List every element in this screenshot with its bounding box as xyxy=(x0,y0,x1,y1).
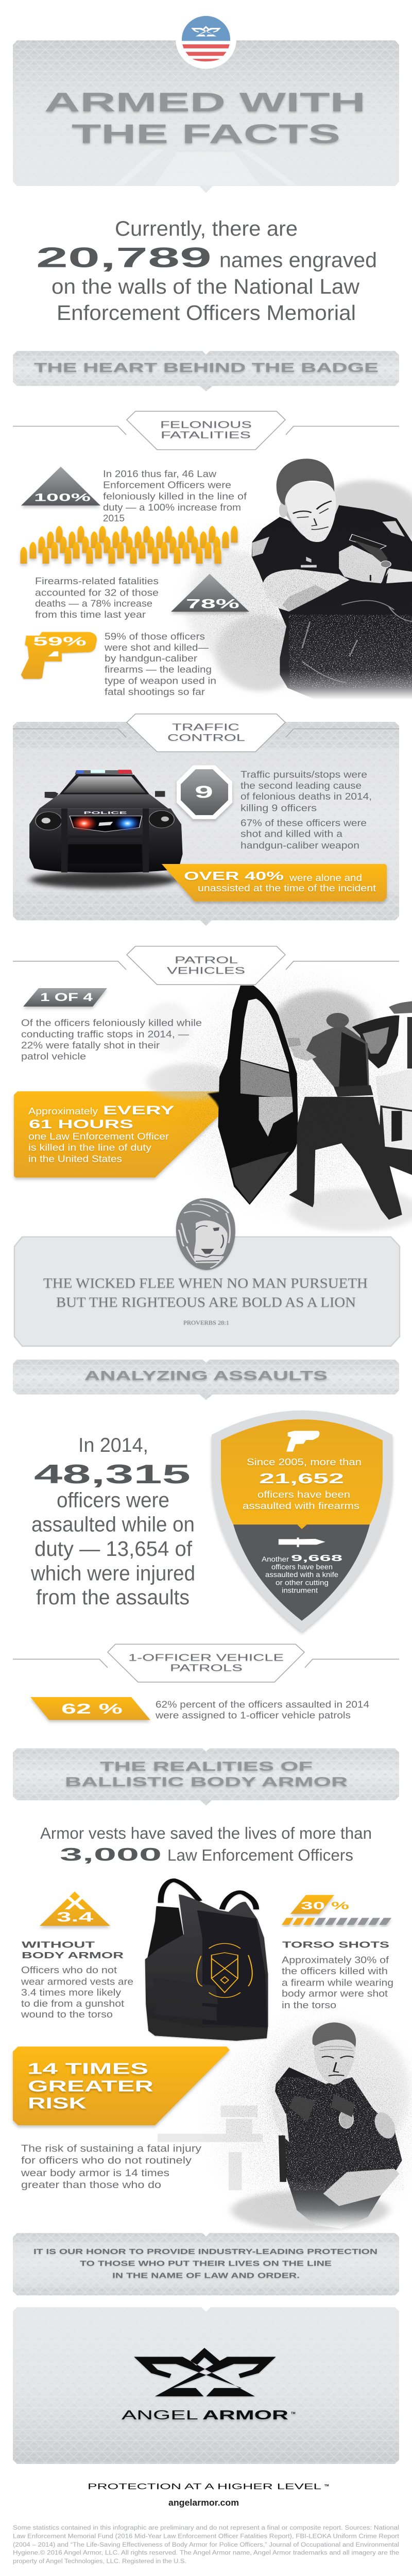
text: traffic pursuits: handgun-caliber weapon xyxy=(241,840,359,851)
photo: uniformed officer portrait xyxy=(158,2004,412,2237)
callout: every 61 hours: Approximately xyxy=(28,1106,98,1116)
text: torso shots: body armor were shot xyxy=(282,1988,388,1998)
shield: assault statistics: officers have been xyxy=(258,1489,350,1500)
text: without body armor: wear armored vests are xyxy=(21,1976,133,1987)
shield: assault statistics: 21,652 xyxy=(259,1470,344,1487)
heading: felonious fatalities: FELONIOUS xyxy=(160,419,252,430)
footnote sources xyxy=(13,2524,400,2565)
text: firearms-related fatalities: accounted for 32 of those xyxy=(35,587,159,598)
text: 62 percent xyxy=(155,1699,369,1721)
callout: over 40% xyxy=(162,864,387,902)
callout: every 61 hours: is killed in the line of duty xyxy=(28,1142,152,1153)
intro statement: Currently, there are xyxy=(115,217,298,241)
panel: proverbs quote xyxy=(14,1236,400,1347)
text: without body armor: to die from a gunshot xyxy=(21,1998,125,2009)
header panel: armed with the facts xyxy=(13,40,399,193)
triangle stat: 78% xyxy=(171,574,249,612)
triangle stat: x 3.4: X xyxy=(64,1893,86,1913)
footnote sources: Hygiene.© 2016 Angel Armor, LLC. All rights reserved. The Angel Armor name, Angel Armor trademarks and all imagery are the xyxy=(13,2549,399,2556)
photo: police car xyxy=(29,770,183,888)
photo: police car: POLICE xyxy=(83,811,127,815)
bullets pictogram: 46 bullets xyxy=(21,526,238,564)
callout: every 61 hours: one Law Enforcement Officer xyxy=(28,1131,169,1142)
text: 46 officers killed xyxy=(103,468,247,523)
title: THE FACTS xyxy=(72,120,340,149)
text: patrol vehicle shootings: patrol vehicle xyxy=(21,1051,86,1061)
website: angelarmor.com xyxy=(168,2498,239,2507)
text: armor vests saved 3,000: 3,000 xyxy=(60,1844,162,1865)
text: without body armor: WITHOUT xyxy=(22,1940,95,1950)
wordmark: angel armor: ANGEL xyxy=(122,2409,198,2422)
shield: assault statistics xyxy=(212,1411,392,1632)
panel: honor statement: IN THE NAME OF LAW AND ORDER. xyxy=(112,2272,300,2280)
text: handgun-caliber firearms: 59% of those officers xyxy=(105,631,205,641)
panel: traffic control xyxy=(13,714,399,926)
text: 48,315 officers assaulted: from the assaults xyxy=(36,1586,190,1609)
text: handgun-caliber firearms: firearms — the leading xyxy=(105,664,212,674)
heading: patrol vehicles: VEHICLES xyxy=(167,965,245,976)
text: firearms-related fatalities: deaths — a 78% increase xyxy=(35,598,152,609)
text: handgun-caliber firearms: were shot and killed— xyxy=(104,642,209,653)
triangle stat: 100% xyxy=(21,467,100,505)
footnote sources: property of Angel Technologies, LLC. Registered in the U.S. xyxy=(13,2557,186,2565)
shield: assault statistics: Another xyxy=(262,1555,289,1563)
text: without body armor: BODY ARMOR xyxy=(22,1950,124,1960)
callout: over 40%: OVER 40% xyxy=(184,870,284,883)
heading: traffic control xyxy=(127,714,285,752)
text: torso shots: TORSO SHOTS xyxy=(282,1940,389,1950)
photo: officer aiming handgun xyxy=(171,459,412,700)
text: patrol vehicle shootings: Of the officers feloniously killed while xyxy=(21,1018,202,1028)
triangle stat: x 3.4 xyxy=(40,1891,110,1926)
callout: over 40%: were alone and xyxy=(289,872,362,883)
text: handgun-caliber firearms xyxy=(104,631,216,697)
text: armor vests saved 3,000 xyxy=(40,1824,372,1865)
text: torso shots: in the torso xyxy=(282,1999,336,2010)
text: handgun-caliber firearms: fatal shootings so far xyxy=(105,686,205,697)
text: risk of fatal injury: wear body armor is 14 times xyxy=(21,2167,169,2179)
intro statement xyxy=(36,217,377,325)
intro statement: on the walls of the National Law xyxy=(52,275,359,298)
heading: traffic control: TRAFFIC xyxy=(172,722,239,733)
text: 48,315 officers assaulted: duty — 13,654 of xyxy=(35,1537,192,1561)
callout: 14 times greater risk xyxy=(13,2046,230,2125)
heading: analyzing assaults xyxy=(13,1360,399,1400)
badge: 1 of 4 xyxy=(23,988,107,1007)
panel: proverbs quote: THE WICKED FLEE WHEN NO MAN PURSUETH xyxy=(43,1275,368,1291)
text: risk of fatal injury xyxy=(21,2143,201,2191)
text: 48,315 officers assaulted xyxy=(30,1434,195,1609)
text: traffic pursuits xyxy=(241,769,372,851)
heading: 1-officer vehicle patrols: PATROLS xyxy=(170,1663,243,1673)
title: ARMED WITH xyxy=(44,88,366,117)
text: risk of fatal injury: for officers who do not routinely xyxy=(21,2155,192,2166)
text: without body armor: wound to the torso xyxy=(21,2009,113,2020)
text: 46 officers killed: duty — a 100% increase from xyxy=(103,502,241,513)
icon: white handgun xyxy=(286,1431,319,1452)
heading: 1-officer vehicle patrols xyxy=(13,1644,399,1682)
heading: the realities of ballistic body armor: BALLISTIC BODY ARMOR xyxy=(65,1775,348,1789)
callout: every 61 hours: 61 HOURS xyxy=(29,1117,133,1131)
triangle stat: x 3.4: 3.4 xyxy=(57,1909,93,1924)
wordmark: angel armor: TM xyxy=(291,2412,296,2415)
text: without body armor: Officers who do not xyxy=(21,1964,117,1975)
callout: 14 times greater risk: RISK xyxy=(28,2094,87,2112)
photo: ballistic vest xyxy=(145,1880,268,2041)
text: 48,315 officers assaulted: 48,315 xyxy=(34,1460,191,1489)
intro statement: Enforcement Officers Memorial xyxy=(57,301,356,325)
heading: the heart behind the badge: THE HEART BEHIND THE BADGE xyxy=(34,361,379,375)
panel: angel armor logo xyxy=(13,2307,399,2464)
icon: handgun with 59%: 59% xyxy=(33,635,87,649)
text: firearms-related fatalities: Firearms-related fatalities xyxy=(35,575,159,586)
text: handgun-caliber firearms: type of weapon used in xyxy=(105,675,216,686)
tagline: TM xyxy=(324,2484,329,2487)
shield: assault statistics: Since 2005, more than xyxy=(247,1456,362,1467)
badge: 30% torso stripes: 30 xyxy=(301,1900,325,1912)
text: torso shots xyxy=(282,1940,393,2010)
text: torso shots: the officers killed with xyxy=(282,1965,388,1976)
text: 48,315 officers assaulted: officers were xyxy=(57,1488,169,1512)
text: 62 percent: were assigned to 1-officer vehicle patrols xyxy=(155,1710,351,1721)
badge: 30% torso stripes xyxy=(282,1895,391,1925)
icon: handgun with 59% xyxy=(21,632,97,679)
octagon stat: 9 xyxy=(177,765,232,819)
text: patrol vehicle shootings: conducting traffic stops in 2014, — xyxy=(21,1029,189,1040)
heading: felonious fatalities xyxy=(13,411,399,450)
text: traffic pursuits: shot and killed with a xyxy=(241,828,343,839)
text: armor vests saved 3,000: Law Enforcement Officers xyxy=(167,1846,353,1864)
callout: over 40%: unassisted at the time of the incident xyxy=(198,883,376,893)
shield: assault statistics: or other cutting xyxy=(276,1579,329,1586)
wordmark: angel armor: ARMOR xyxy=(202,2409,288,2422)
shield: assault statistics: 9,668 xyxy=(291,1553,342,1563)
callout: every 61 hours: EVERY xyxy=(103,1104,175,1117)
tagline: PROTECTION AT A HIGHER LEVEL xyxy=(88,2483,321,2492)
icon: flag badge xyxy=(176,10,236,69)
title xyxy=(44,88,366,149)
text: traffic pursuits: 67% of these officers were xyxy=(241,818,367,828)
triangle stat: 78%: 78% xyxy=(186,597,240,611)
text: torso shots: Approximately 30% of xyxy=(282,1955,389,1965)
text: traffic pursuits: the second leading cause xyxy=(241,780,362,791)
text: 46 officers killed: feloniously killed in the line of xyxy=(103,491,247,502)
logo mark xyxy=(134,2348,276,2396)
text: risk of fatal injury: greater than those who do xyxy=(21,2179,161,2191)
shield: assault statistics: assaulted with firearms xyxy=(243,1500,359,1511)
heading: 1-officer vehicle patrols: 1-OFFICER VEHICLE xyxy=(128,1652,284,1663)
callout: 14 times greater risk: GREATER xyxy=(28,2077,153,2095)
badge: 1 of 4: 1 OF 4 xyxy=(40,991,93,1004)
heading: the heart behind the badge xyxy=(13,351,399,392)
text: handgun-caliber firearms: by handgun-caliber xyxy=(105,653,197,664)
heading: analyzing assaults: ANALYZING ASSAULTS xyxy=(84,1369,328,1383)
text: patrol vehicle shootings xyxy=(21,1018,202,1061)
panel: honor statement: TO THOSE WHO PUT THEIR LIVES ON THE LINE xyxy=(80,2260,332,2268)
heading: patrol vehicles: PATROL xyxy=(175,955,238,965)
shield: assault statistics: assaulted with a knife xyxy=(265,1571,338,1579)
text: 46 officers killed: 2015 xyxy=(103,513,125,523)
heading: the realities of ballistic body armor xyxy=(13,1749,399,1806)
text: torso shots: a firearm while wearing xyxy=(282,1977,393,1988)
badge: 62% xyxy=(30,1697,150,1720)
panel: honor statement: IT IS OUR HONOR TO PROVIDE INDUSTRY-LEADING PROTECTION xyxy=(33,2248,377,2256)
heading: the realities of ballistic body armor: THE REALITIES OF xyxy=(100,1760,313,1774)
badge: 62%: 62 % xyxy=(61,1701,123,1717)
text: armor vests saved 3,000: Armor vests have saved the lives of more than xyxy=(40,1824,372,1842)
text: 46 officers killed: Enforcement Officers were xyxy=(103,480,231,490)
intro statement: names engraved xyxy=(219,248,377,272)
wordmark: angel armor xyxy=(122,2409,296,2422)
text: 48,315 officers assaulted: which were injured xyxy=(30,1562,195,1585)
shield: assault statistics: officers have been xyxy=(271,1563,333,1571)
tagline xyxy=(88,2483,329,2492)
callout: every 61 hours: in the United States xyxy=(28,1154,122,1164)
icon: lion head xyxy=(176,1198,235,1270)
text: traffic pursuits: of felonious deaths in 2014, xyxy=(241,791,372,802)
heading: felonious fatalities: FATALITIES xyxy=(161,430,251,440)
panel: proverbs quote: BUT THE RIGHTEOUS ARE BOLD AS A LION xyxy=(56,1294,356,1310)
text: without body armor xyxy=(21,1940,133,2020)
text: risk of fatal injury: The risk of sustaining a fatal injury xyxy=(21,2143,201,2154)
octagon stat: 9: 9 xyxy=(195,783,213,802)
triangle stat: 100%: 100% xyxy=(34,491,91,503)
text: 48,315 officers assaulted: assaulted while on xyxy=(31,1513,195,1536)
heading: patrol vehicles xyxy=(13,946,399,985)
text: 46 officers killed: In 2016 thus far, 46 Law xyxy=(103,468,217,479)
photo: officer behind patrol car door xyxy=(145,960,412,1231)
shield: assault statistics: instrument xyxy=(282,1587,318,1595)
icon: knife xyxy=(279,1537,325,1547)
text: 48,315 officers assaulted: In 2014, xyxy=(78,1434,148,1456)
panel: honor statement xyxy=(13,2233,399,2295)
text: firearms-related fatalities: from this time last year xyxy=(35,609,146,620)
heading: traffic control: CONTROL xyxy=(167,732,245,743)
text: patrol vehicle shootings: 22% were fatally shot in their xyxy=(21,1040,160,1050)
text: 62 percent: 62% percent of the officers assaulted in 2014 xyxy=(156,1699,369,1709)
callout: every 61 hours xyxy=(14,1091,244,1178)
intro statement: 20,789 xyxy=(36,242,212,273)
footnote sources: Law Enforcement Memorial Fund (2016 Mid-Year Law Enforcement Officer Fatalities Report), FBI-LEOKA Uniform Crime Report xyxy=(13,2533,400,2539)
footnote sources: Some statistics contained in this infographic are preliminary and do not represent a final or composite report. Sources: National xyxy=(13,2524,399,2531)
callout: 14 times greater risk: 14 TIMES xyxy=(27,2060,148,2077)
footnote sources: (2004 – 2014) and “The Life-Saving Effectiveness of Body Armor for Police Officers,” Journal of Occupational and Environmental xyxy=(13,2541,399,2548)
text: without body armor: 3.4 times more likely xyxy=(21,1987,122,1998)
text: firearms-related fatalities xyxy=(35,575,159,620)
text: traffic pursuits: killing 9 officers xyxy=(241,803,317,813)
panel: proverbs quote: PROVERBS 28:1 xyxy=(183,1319,229,1326)
text: traffic pursuits: Traffic pursuits/stops were xyxy=(241,769,367,780)
badge: 30% torso stripes: % xyxy=(331,1900,349,1912)
